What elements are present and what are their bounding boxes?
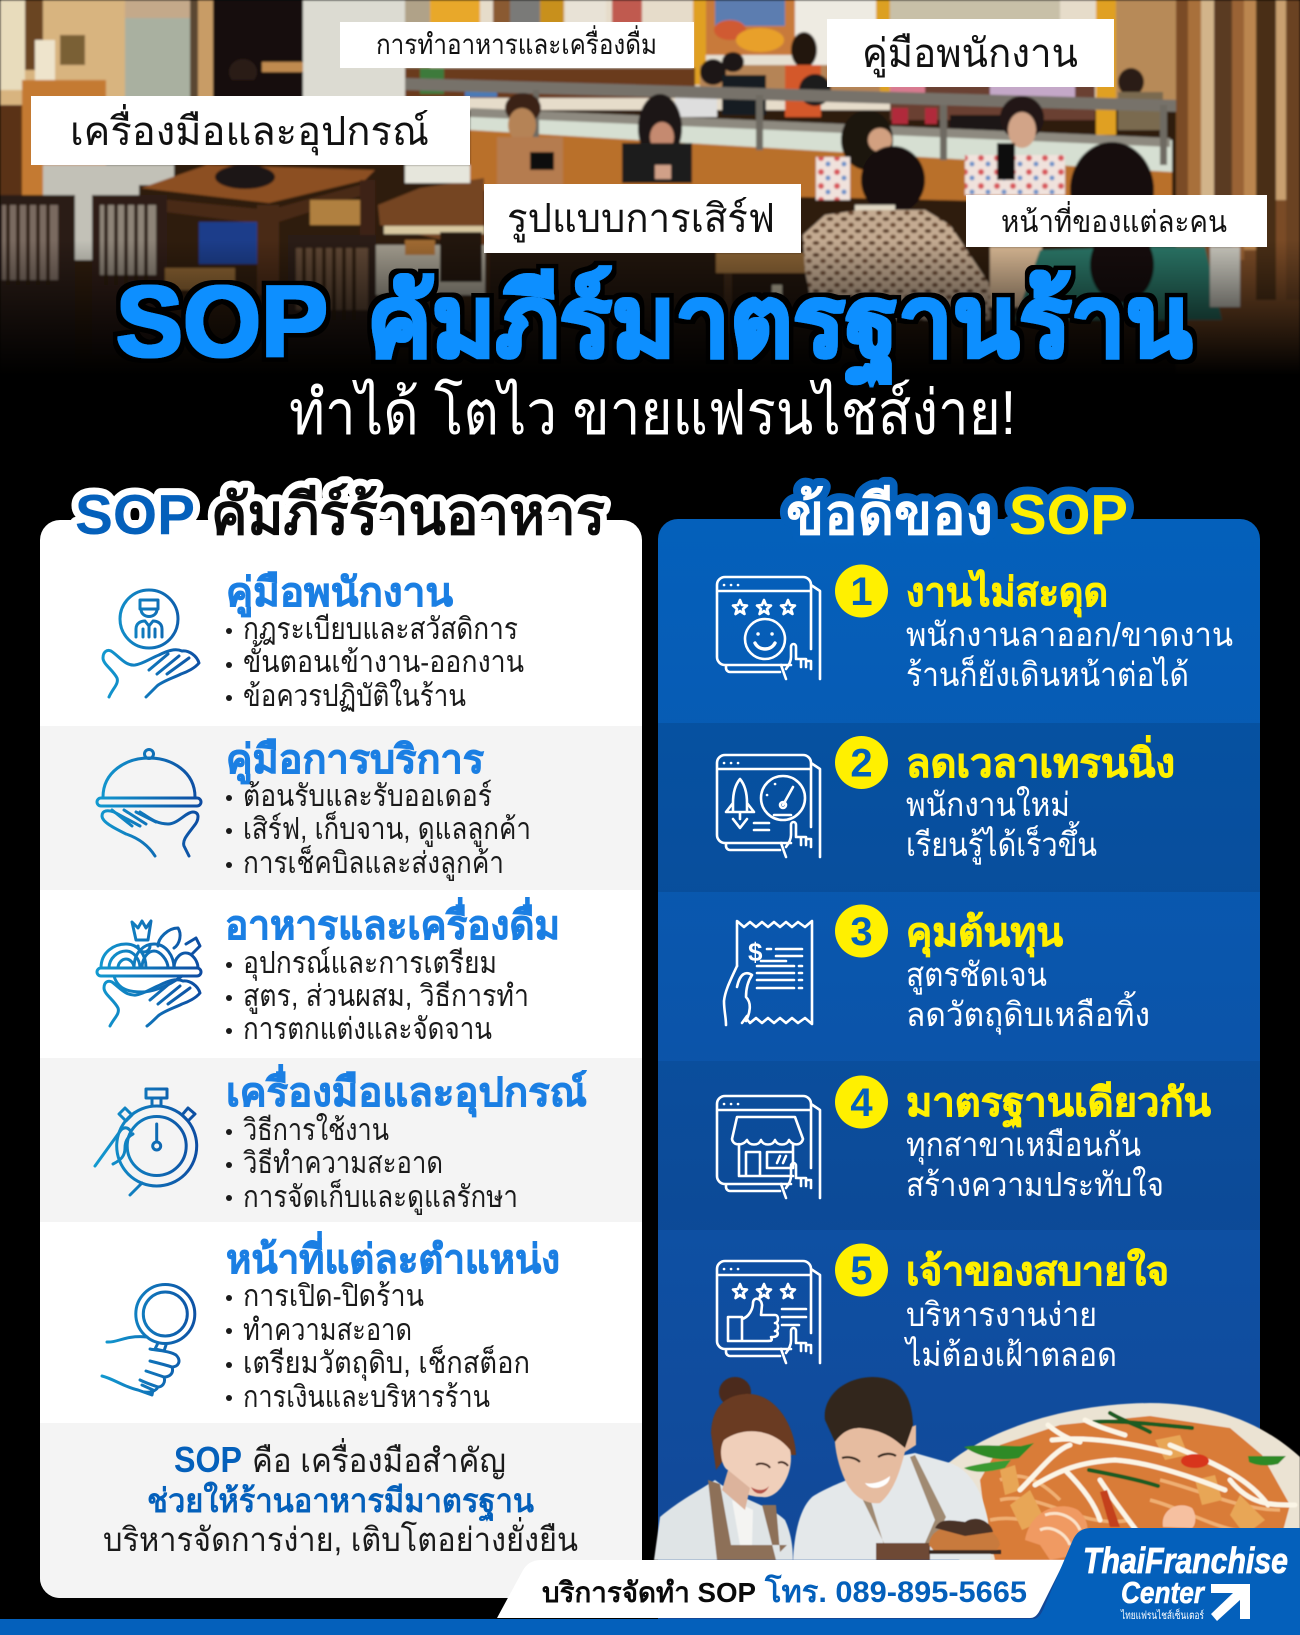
summary text: บริหารจัดการง่าย, เติบโตอย่างยั่งยืน	[103, 1517, 578, 1558]
heading: เจ้าของสบายใจ	[906, 1248, 1169, 1294]
benefit 5	[717, 1244, 1169, 1373]
row: staff manual	[103, 571, 524, 713]
row: service manual	[97, 738, 531, 881]
number badge: 3	[850, 910, 873, 954]
description: ลดวัตถุดิบเหลือทิ้ง	[906, 991, 1150, 1035]
list	[226, 1113, 518, 1215]
number badge	[835, 904, 888, 958]
description: สูตรชัดเจน	[906, 956, 1047, 995]
description: ทุกสาขาเหมือนกัน	[906, 1126, 1141, 1165]
icon: receipt in hand	[724, 921, 812, 1025]
heading: SOP manual: SOP	[75, 483, 195, 547]
list: อุปกรณ์และการเตรียม	[243, 946, 497, 982]
logo: ThaiFranchise Center: ไทยแฟรนไชส์เซ็นเตอร์	[1120, 1608, 1204, 1622]
benefit 1	[717, 564, 1233, 693]
contact bar: บริการจัดทำ SOP	[542, 1577, 756, 1608]
list: สูตร, ส่วนผสม, วิธีการทำ	[243, 980, 529, 1014]
panel: benefits	[658, 483, 1260, 1620]
tag: service style: รูปแบบการเสิร์ฟ	[507, 196, 775, 242]
number badge: 2	[850, 742, 873, 786]
photo: restaurant interior	[0, 0, 1300, 375]
photo: pad thai plate	[946, 1403, 1300, 1565]
heading: ลดเวลาเทรนนิ่ง	[906, 735, 1175, 786]
description	[903, 1296, 1117, 1373]
icon: magnifier in hand	[102, 1284, 195, 1395]
tag: duties: หน้าที่ของแต่ละคน	[1001, 201, 1227, 239]
list: เสิร์ฟ, เก็บจาน, ดูแลลูกค้า	[243, 810, 531, 847]
logo: ThaiFranchise Center	[0, 1528, 1300, 1635]
contact bar	[497, 1560, 1065, 1618]
row: food and drink	[97, 897, 560, 1046]
summary text: ช่วยให้ร้านอาหารมีมาตรฐาน	[147, 1481, 534, 1522]
description: เรียนรู้ได้เร็วขึ้น	[906, 821, 1097, 865]
list: การเปิด-ปิดร้าน	[243, 1280, 424, 1313]
heading: มาตรฐานเดียวกัน	[906, 1081, 1211, 1129]
tag: cooking: การทำอาหารและเครื่องดื่ม	[376, 25, 657, 60]
heading: benefits	[786, 483, 1128, 547]
heading: หน้าที่แต่ละตำแหน่ง	[226, 1231, 560, 1282]
number badge	[835, 1244, 888, 1296]
contact bar: โทร. 089-895-5665	[764, 1573, 1027, 1609]
icon: cloche on hand	[97, 750, 201, 856]
number badge: 5	[850, 1249, 873, 1293]
summary text	[103, 1438, 578, 1558]
icon: storefront window	[717, 1096, 820, 1198]
icon: noodle dish on hand	[97, 921, 201, 1026]
summary text: คือ เครื่องมือสำคัญ	[252, 1438, 506, 1479]
benefit 4	[717, 1076, 1211, 1203]
number badge	[835, 736, 888, 789]
benefit 2	[717, 735, 1175, 865]
heading: คุมต้นทุน	[906, 911, 1063, 958]
panel: SOP manual	[40, 483, 642, 1598]
tag: duties	[966, 195, 1267, 247]
tag: tools	[31, 96, 470, 165]
description	[906, 956, 1150, 1035]
list	[226, 779, 531, 881]
list: วิธีทำความสะอาด	[243, 1147, 443, 1180]
heading: benefits: ข้อดีของ	[786, 483, 993, 547]
heading: benefits: SOP	[1009, 483, 1128, 547]
photo: man in apron with pastry	[793, 1377, 1001, 1560]
heading: เครื่องมือและอุปกรณ์	[226, 1064, 587, 1118]
description: พนักงานใหม่	[906, 786, 1070, 823]
logo: ThaiFranchise Center: Center	[1121, 1575, 1206, 1610]
tag: cooking	[340, 22, 694, 68]
title	[116, 266, 1192, 387]
list: กฎระเบียบและสวัสดิการ	[243, 613, 518, 646]
description: บริหารงานง่าย	[906, 1296, 1097, 1333]
number badge: 4	[850, 1081, 873, 1125]
list: เตรียมวัตถุดิบ, เช็กสต็อก	[243, 1344, 530, 1382]
list: วิธีการใช้งาน	[243, 1113, 389, 1147]
description: ไม่ต้องเฝ้าตลอด	[903, 1336, 1117, 1373]
description	[906, 786, 1097, 865]
summary text: SOP	[174, 1439, 242, 1480]
list	[226, 946, 529, 1046]
heading: งานไม่สะดุด	[906, 569, 1108, 618]
icon: rating window	[717, 577, 820, 679]
description	[906, 616, 1233, 693]
list: ต้อนรับและรับออเดอร์	[243, 779, 492, 813]
heading: คู่มือการบริการ	[226, 738, 485, 784]
benefit 3	[724, 904, 1150, 1035]
list	[226, 1280, 530, 1414]
icon: receipt in hand: $	[748, 937, 763, 967]
tag: staff manual	[827, 19, 1114, 87]
description: พนักงานลาออก/ขาดงาน	[906, 616, 1233, 653]
subtitle: ทำได้ โตไว ขายแฟรนไชส์ง่าย!	[289, 378, 1016, 448]
list: การจัดเก็บและดูแลรักษา	[243, 1178, 518, 1215]
title: คัมภีร์มาตรฐานร้าน	[367, 266, 1192, 387]
number badge	[835, 564, 888, 618]
photo fade	[0, 240, 1300, 375]
description: สร้างความประทับใจ	[906, 1166, 1164, 1203]
tag: staff manual: คู่มือพนักงาน	[862, 32, 1078, 77]
icon: rocket and gauge window	[717, 755, 820, 857]
list	[226, 613, 524, 713]
list: ทำความสะอาด	[243, 1314, 412, 1347]
icon: arrow	[1211, 1584, 1250, 1621]
icon: thumbs up window	[717, 1261, 820, 1363]
list: การเช็คบิลและส่งลูกค้า	[243, 844, 504, 881]
photo: woman in apron	[654, 1377, 796, 1560]
tag: tools: เครื่องมือและอุปกรณ์	[70, 104, 429, 156]
list: การเงินและบริหารร้าน	[243, 1381, 490, 1414]
icon: stopwatch in hand	[95, 1089, 197, 1195]
number badge	[835, 1076, 888, 1128]
list: การตกแต่งและจัดจาน	[243, 1013, 492, 1046]
heading: อาหารและเครื่องดื่ม	[225, 897, 560, 948]
heading: SOP manual: คัมภีร์ร้านอาหาร	[211, 483, 605, 547]
number badge: 1	[850, 570, 873, 614]
description	[906, 1126, 1164, 1203]
heading: คู่มือพนักงาน	[226, 571, 453, 617]
row: duties	[102, 1231, 560, 1414]
description: ร้านก็ยังเดินหน้าต่อได้	[906, 655, 1189, 693]
list: ขั้นตอนเข้างาน-ออกงาน	[243, 640, 524, 679]
row: tools and equipment	[95, 1064, 587, 1215]
icon: person on open hand	[103, 590, 199, 697]
title: SOP	[116, 266, 328, 378]
tag: service style	[484, 184, 801, 253]
list: ข้อควรปฏิบัติในร้าน	[243, 679, 466, 713]
